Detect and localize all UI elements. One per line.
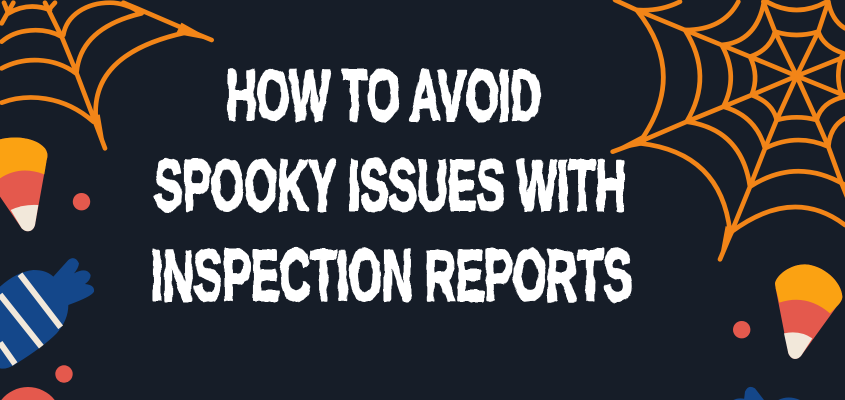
icon: red dot right — [733, 321, 750, 338]
icon: spider web top left — [2, 3, 212, 148]
icon: red circle bottom left — [1, 387, 55, 400]
title line 1: HOW TO AVOID — [226, 57, 541, 136]
icon: candy corn right — [775, 264, 842, 359]
icon: red dot lower left — [55, 365, 73, 383]
icon: large spider web top right — [613, 0, 845, 259]
title — [151, 57, 632, 316]
icon: wrapped blue candy left — [0, 258, 94, 369]
icon: wrapped blue candy bottom right — [733, 387, 800, 400]
icon: candy corn left — [0, 137, 47, 231]
icon: red dot upper left — [73, 193, 90, 210]
